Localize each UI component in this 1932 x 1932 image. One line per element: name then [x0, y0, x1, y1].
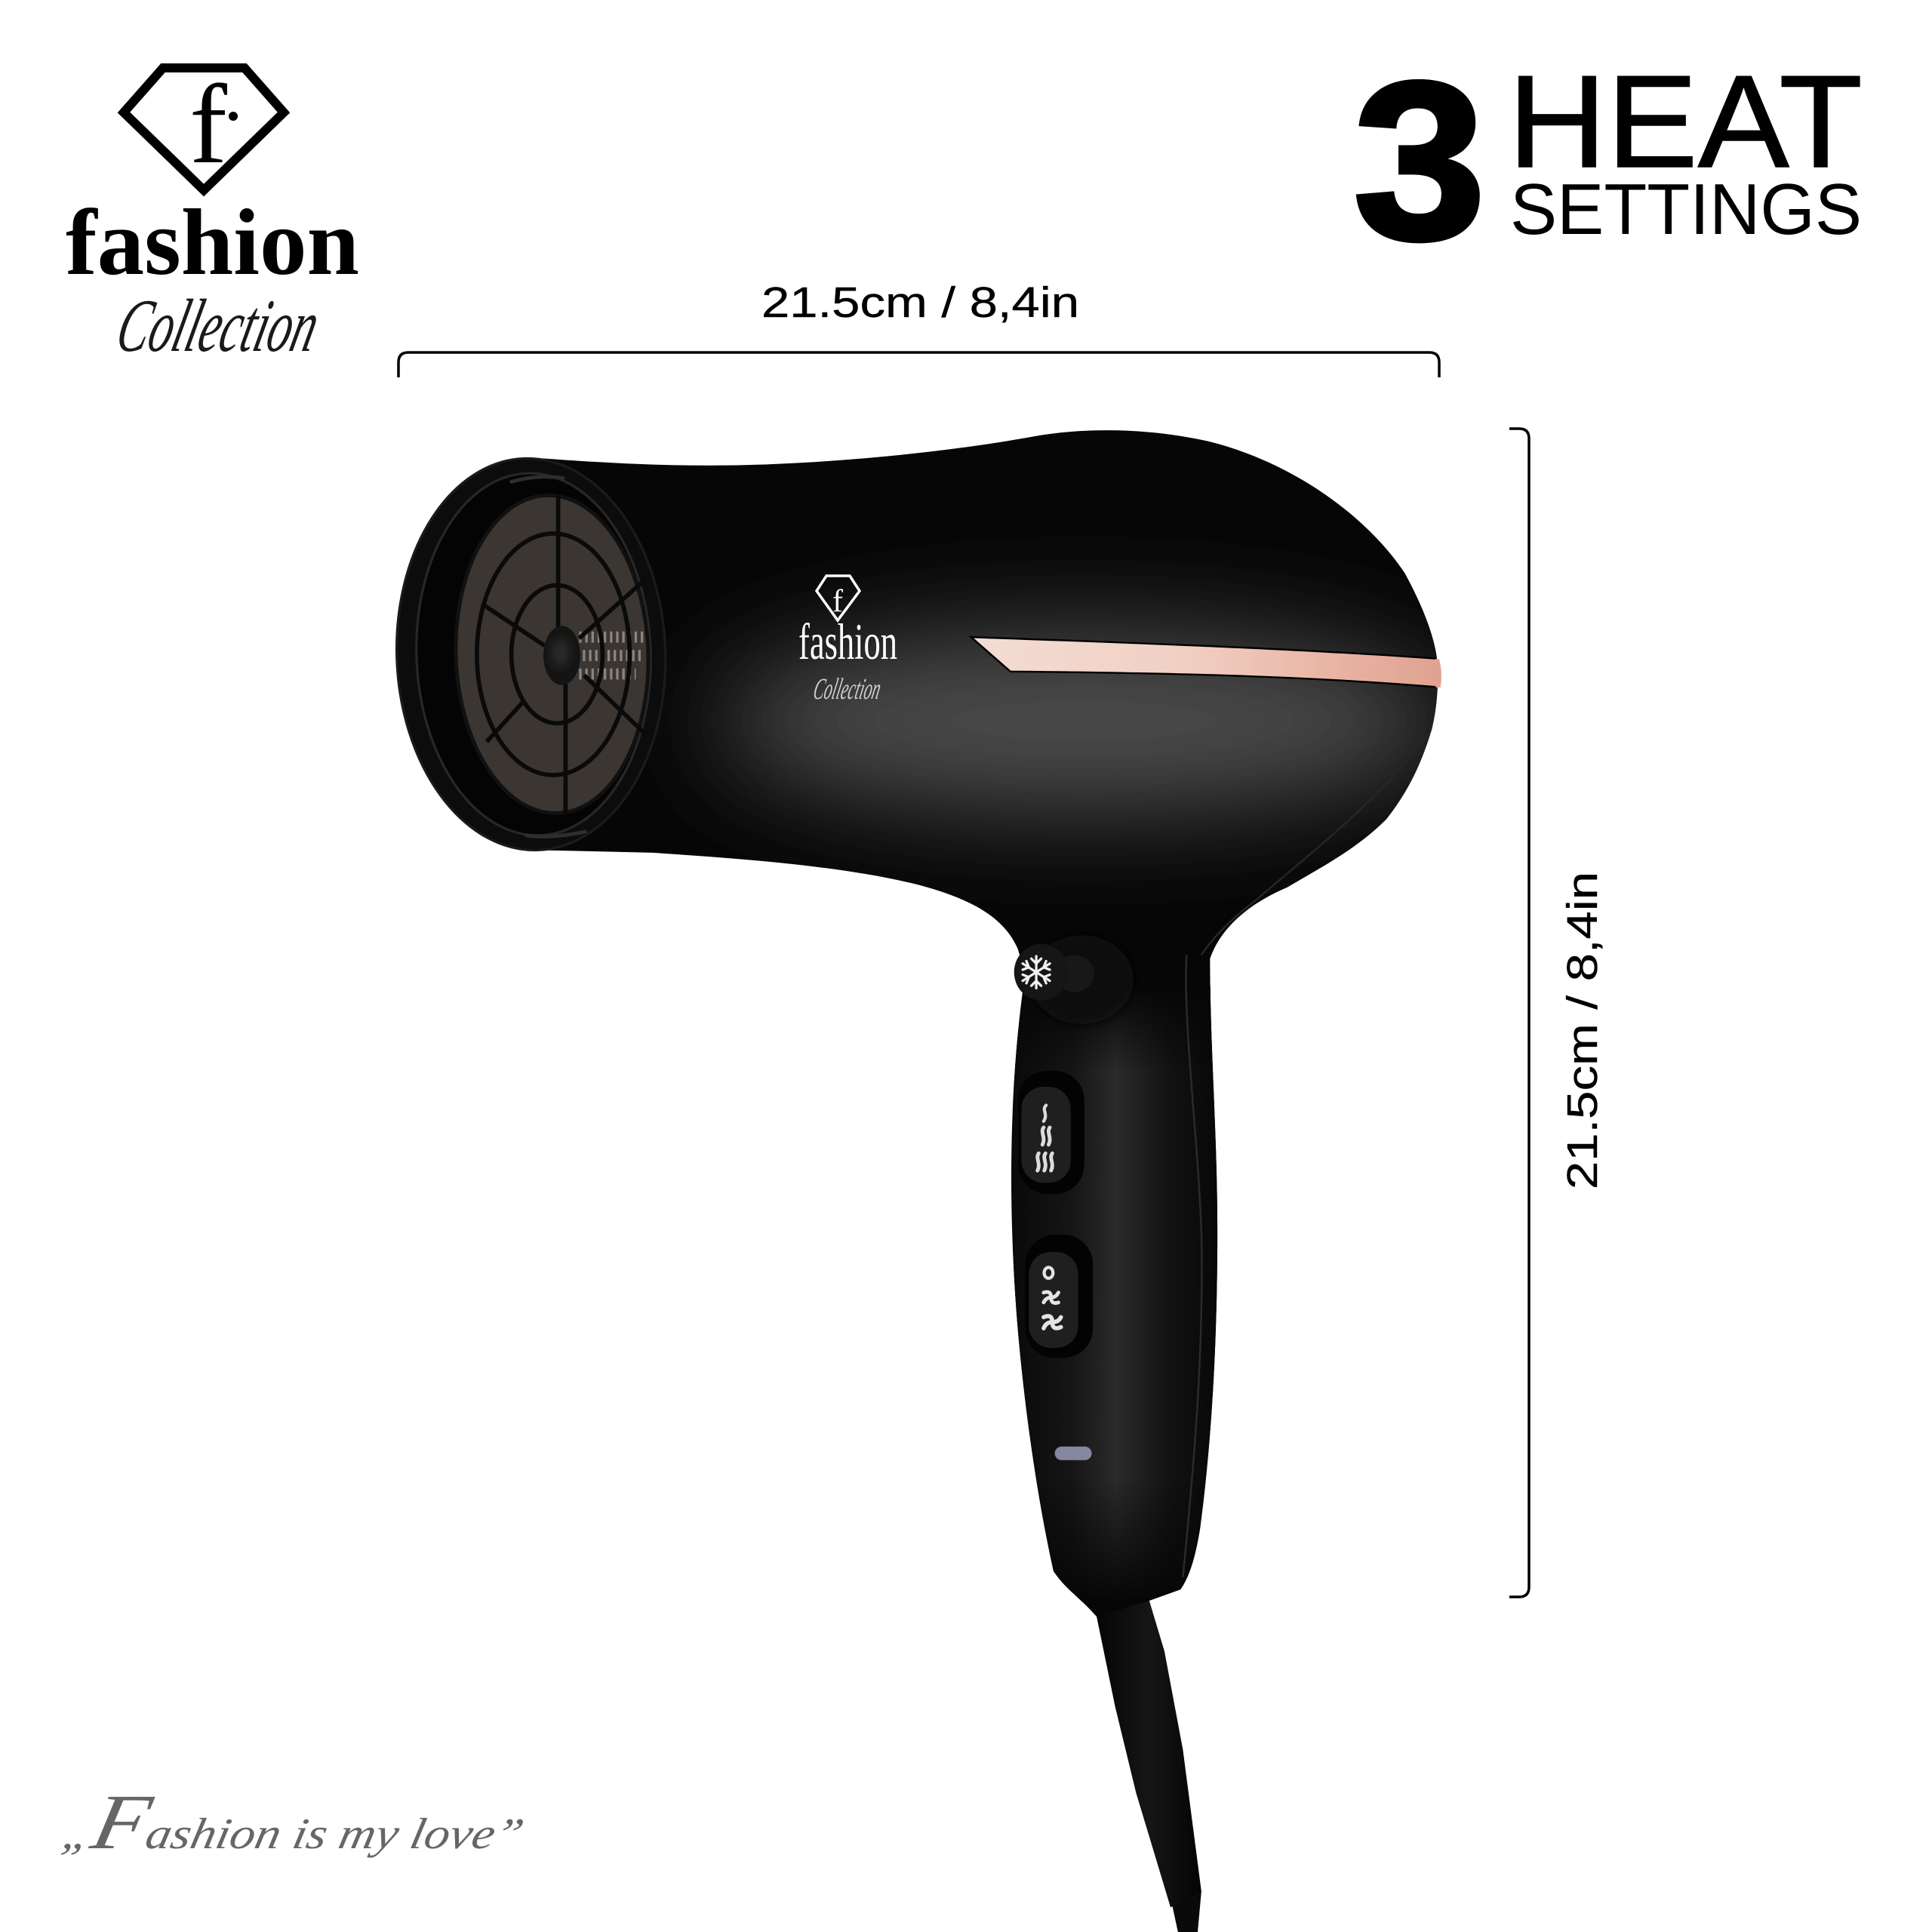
rim tabs [512, 477, 586, 837]
dryer body [542, 430, 1438, 1617]
icon: heat levels [1038, 1106, 1052, 1171]
fan switch [1025, 1235, 1093, 1358]
height label: 21.5cm / 8,4in [1558, 872, 1607, 1189]
product logo on dryer [798, 576, 897, 706]
icon: snowflake [1023, 956, 1050, 988]
icon: small diamond [817, 576, 860, 620]
indicator light [1055, 1447, 1092, 1460]
icon: small diamond: f [832, 584, 843, 619]
dryer brand script: Collection [811, 672, 884, 706]
headline: 3 heat settings [1353, 35, 1863, 287]
numeral 3: 3 [1353, 35, 1486, 287]
width bracket [398, 352, 1439, 377]
width label: 21.5cm / 8,4in [761, 278, 1079, 327]
nozzle rim [390, 454, 672, 855]
nozzle [390, 454, 672, 855]
width dimension [398, 278, 1439, 377]
hair dryer [390, 430, 1454, 1932]
grille rings and spokes [477, 495, 646, 814]
brand script: Collection: Collection [109, 284, 328, 368]
tagline: „Fashion is my love” [57, 1778, 535, 1866]
height bracket [1509, 429, 1529, 1597]
icon: diamond f logo [124, 62, 284, 190]
icon: fan speeds [1044, 1267, 1061, 1328]
logo: fashion collection [66, 62, 359, 368]
subheading: SETTINGS: SETTINGS [1510, 169, 1862, 250]
body shading [715, 629, 1454, 1602]
brand name: fashion: fashion [66, 191, 359, 295]
grille hub [543, 626, 580, 685]
power cord [1097, 1589, 1201, 1932]
height dimension [1509, 429, 1607, 1597]
heading: HEAT: HEAT [1508, 48, 1863, 195]
heat switch [1018, 1071, 1084, 1194]
heating coil [577, 637, 643, 674]
grille mesh [451, 492, 654, 817]
icon: diamond f logo: f [189, 62, 227, 187]
rose gold accent strip [971, 637, 1441, 688]
dryer brand name: fashion [798, 613, 897, 670]
cool shot button [1014, 935, 1134, 1024]
